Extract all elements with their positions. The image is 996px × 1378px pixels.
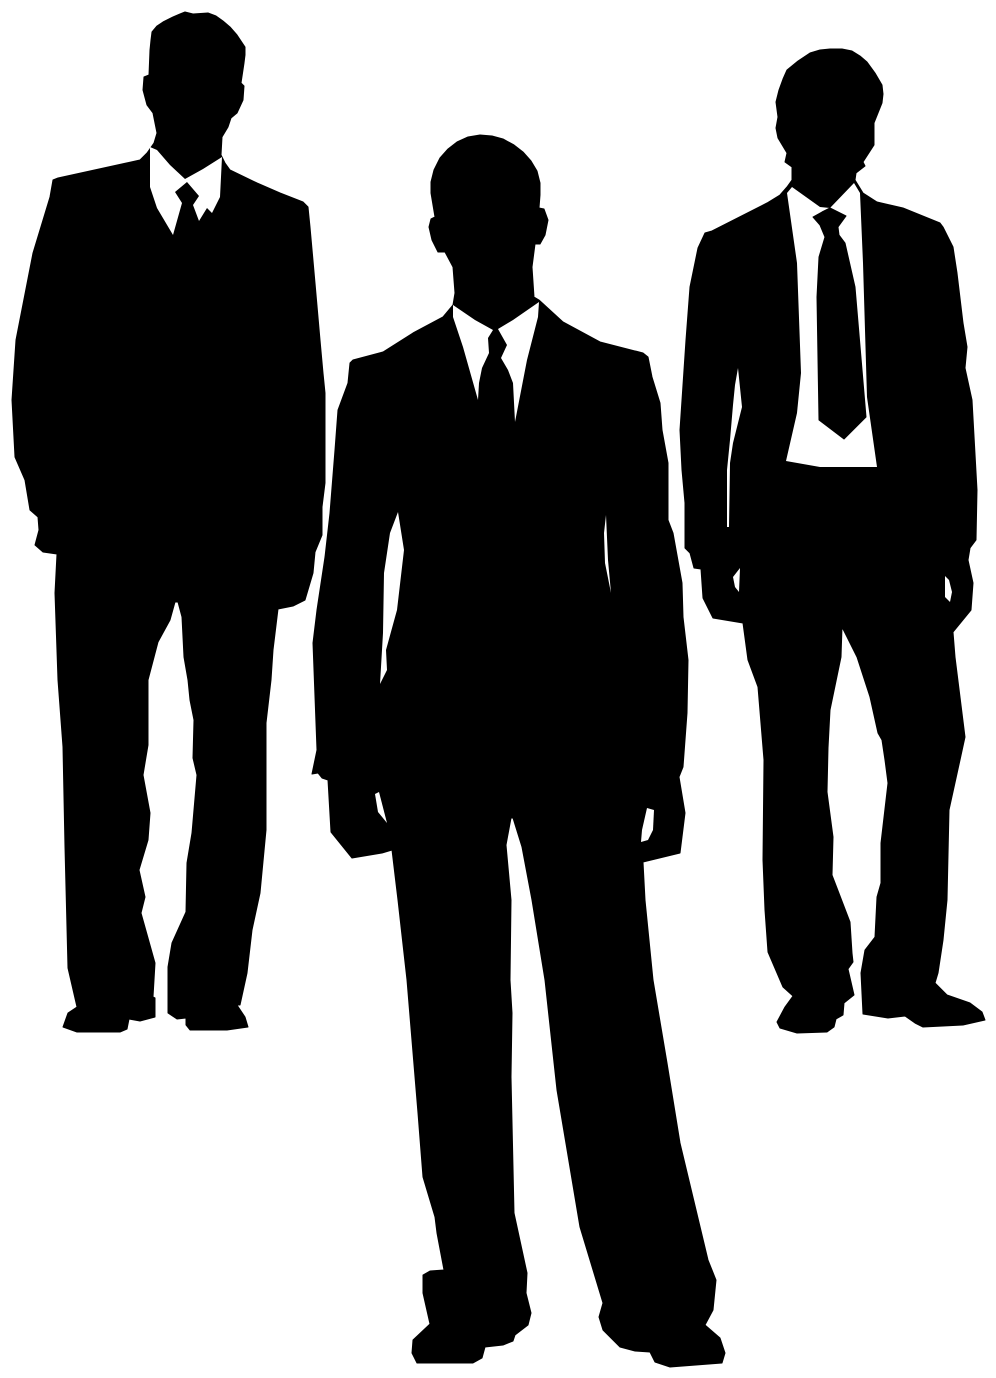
silhouette: left man body — [12, 12, 325, 1032]
gap: right man right hand — [945, 576, 952, 602]
gap: right man left hand — [733, 568, 740, 592]
gap: right man arm gap — [727, 368, 742, 527]
figure: right man in suit — [680, 49, 985, 1033]
shirt: centre man collar left — [453, 305, 493, 400]
shirt: right man open shirt front — [786, 183, 877, 467]
gap: centre man right hand — [641, 808, 654, 842]
figure: left man in suit — [12, 12, 325, 1032]
silhouette: right man body — [680, 49, 985, 1033]
gap: centre man left hand — [375, 792, 387, 823]
shirt: centre man collar right — [498, 302, 539, 422]
gap: centre man right waist — [604, 515, 611, 593]
figure: centre man in suit — [312, 135, 725, 1367]
gap: centre man left waist — [380, 512, 404, 684]
shirt: left man collar with tie cut-out — [150, 147, 222, 235]
tie: right man long tie — [813, 208, 866, 439]
silhouette: centre man body — [312, 135, 725, 1367]
